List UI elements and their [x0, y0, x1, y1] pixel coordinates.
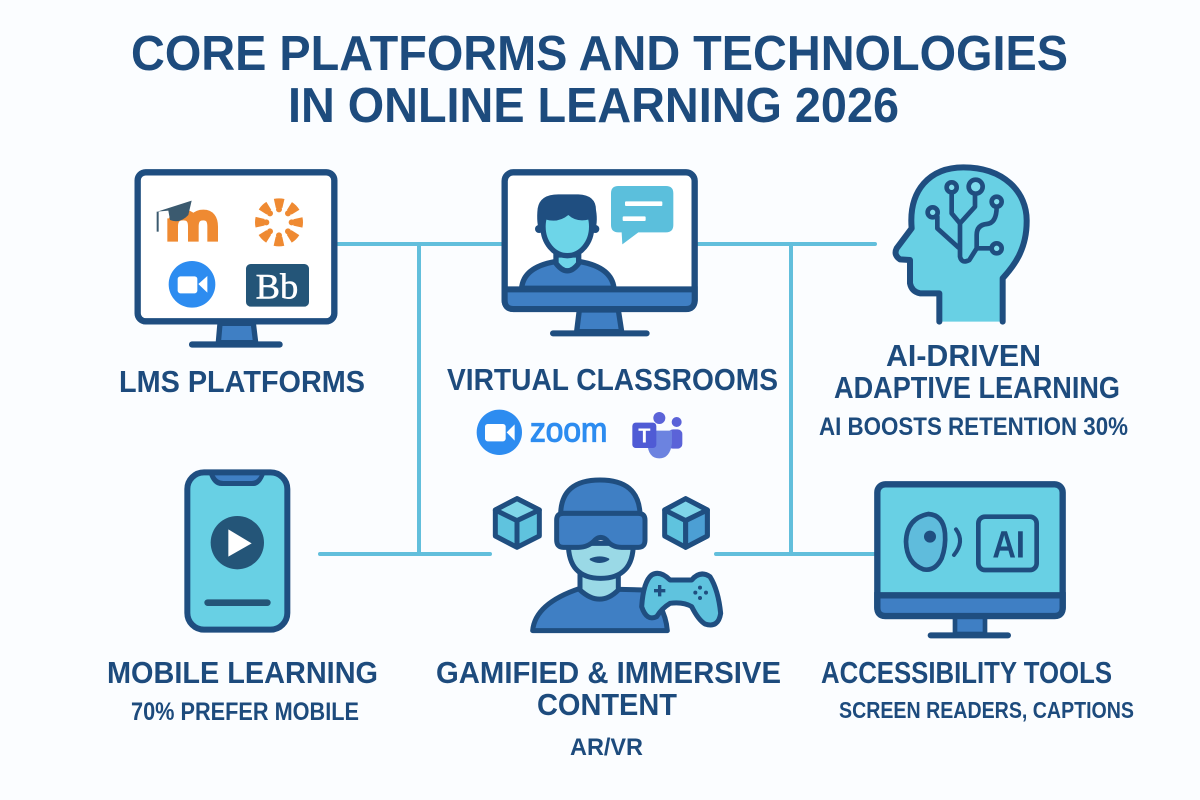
title: CORE PLATFORMS AND TECHNOLOGIES: [131, 27, 1068, 81]
icon: monitor with LMS logos: [138, 172, 334, 348]
icon: head with circuit brain: [896, 167, 1027, 322]
connector lines: [320, 244, 875, 554]
panel: AI-driven adaptive learning: [819, 167, 1128, 441]
heading: gamified and immersive content: [436, 655, 781, 722]
heading: AI-driven adaptive learning: ADAPTIVE LEARNING: [834, 370, 1120, 405]
title: [131, 27, 1068, 133]
logos: Zoom and Teams: zoom: [530, 411, 607, 449]
heading: gamified and immersive content: CONTENT: [537, 687, 677, 722]
icon: VR user with cubes and controller: [495, 480, 721, 631]
icon: monitor with video call person: [505, 172, 695, 336]
title: IN ONLINE LEARNING 2026: [288, 79, 899, 133]
icon: phone with play button: [187, 472, 287, 630]
icon: monitor with ear and AI box: [877, 484, 1063, 638]
panel: gamified and immersive content: [436, 480, 781, 761]
heading: LMS platforms: LMS PLATFORMS: [119, 364, 365, 399]
caption: AI retention: AI BOOSTS RETENTION 30%: [819, 413, 1128, 441]
panel: virtual classrooms: [447, 172, 778, 458]
panel: mobile learning: [107, 472, 378, 726]
heading: AI-driven adaptive learning: AI-DRIVEN: [886, 338, 1041, 373]
heading: gamified and immersive content: GAMIFIED & IMMERSIVE: [436, 655, 781, 690]
caption: AR/VR: AR/VR: [570, 734, 643, 761]
heading: mobile learning: MOBILE LEARNING: [107, 655, 378, 690]
caption: screen readers and captions: SCREEN READERS, CAPTIONS: [839, 697, 1134, 723]
heading: accessibility tools: ACCESSIBILITY TOOLS: [821, 655, 1112, 690]
icon: monitor with ear and AI box: AI: [992, 523, 1025, 566]
panel: accessibility tools: [821, 484, 1134, 723]
heading: virtual classrooms: VIRTUAL CLASSROOMS: [447, 362, 778, 397]
panel: LMS platforms: [119, 172, 365, 399]
logos: Zoom and Teams: [477, 410, 682, 458]
heading: AI-driven adaptive learning: [834, 338, 1120, 405]
caption: prefer mobile: 70% PREFER MOBILE: [131, 698, 359, 726]
icon: monitor with LMS logos: Bb: [256, 267, 298, 307]
logos: Zoom and Teams: T: [638, 426, 650, 448]
